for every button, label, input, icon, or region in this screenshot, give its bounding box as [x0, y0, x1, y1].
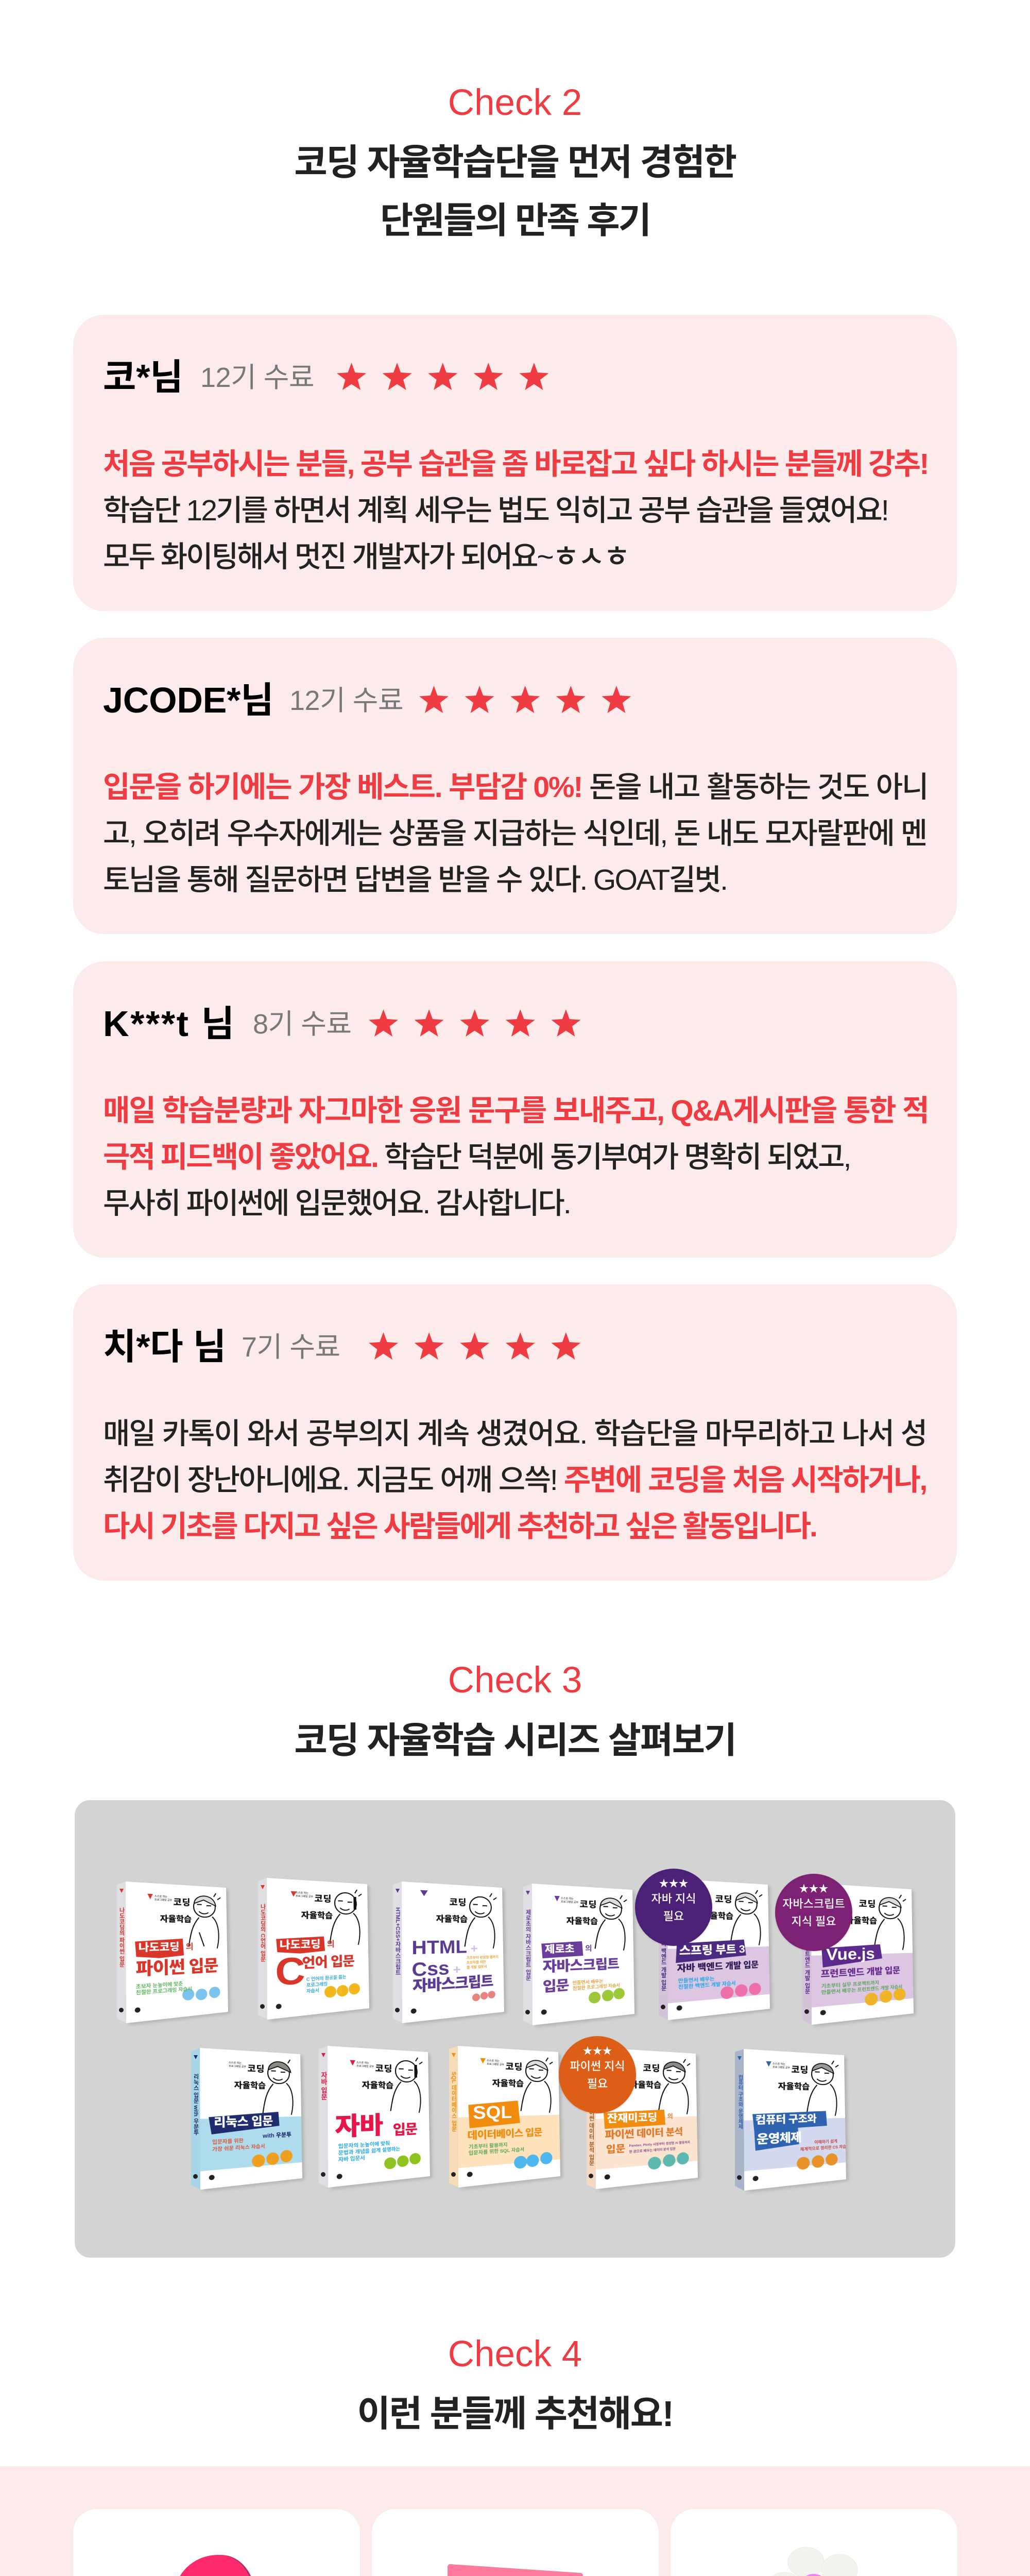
- heading: reviews: 코딩 자율학습단을 먼저 경험한: [294, 142, 736, 182]
- book: C language: 스스로 하는: [296, 1891, 308, 1895]
- review card 1: [73, 315, 957, 611]
- book: SQL: 기초부터 활용까지: [469, 2142, 508, 2150]
- book: python: 코딩: [173, 1897, 191, 1907]
- book: HTML CSS JavaScript: 코딩: [449, 1897, 467, 1907]
- review text: 다시 기초를 다지고 싶은 사람들에게 추천하고 싶은 활동입니다.: [103, 1510, 816, 1543]
- book: python: 친절한 프로그래밍 자습서: [136, 1987, 192, 1996]
- book: Vue.js: 기초부터 실무 프로젝트까지: [821, 1980, 879, 1990]
- book: Python data analysis: 자율학습: [630, 2080, 661, 2090]
- book: Python data analysis: 파이썬 데이터 분석 입문: [588, 2104, 594, 2165]
- book: Linux: 가장 쉬운 리눅스 자습서: [212, 2144, 265, 2153]
- book: Vue.js: Vue.js: [826, 1945, 875, 1964]
- book: Java: 자바 입문: [320, 2072, 328, 2100]
- book: Java: [319, 2046, 434, 2190]
- heading: recommendations: 이런 분들께 추천해요!: [357, 2394, 673, 2434]
- reviewer name: 치*다 님: [103, 1327, 226, 1367]
- book: HTML CSS JavaScript: 기초부터 완성형 웹까지: [467, 1956, 499, 1960]
- badge: Python knowledge required: ★★★: [582, 2046, 612, 2057]
- review text: 입문을 하기에는 가장 베스트. 부담감 0%! 돈을 내고 활동하는 것도 아니: [103, 771, 928, 804]
- cohort label: 12기 수료: [289, 685, 403, 716]
- book: Linux: 스스로 하는: [229, 2061, 242, 2065]
- book: Java: 스스로 하는: [356, 2061, 369, 2065]
- cohort label: 7기 수료: [242, 1332, 340, 1363]
- book: Python data analysis: Pandas, Plotly 사용부터 생성형 AI 활용까지: [629, 2141, 690, 2148]
- recommendation card: learners: [671, 2509, 957, 2576]
- book: SQL: SQL: [473, 2102, 512, 2123]
- badge: JavaScript knowledge required: 자바스크립트: [782, 1897, 845, 1910]
- book: python: 의: [186, 1942, 194, 1952]
- book: SQL: 데이터베이스 입문: [467, 2127, 542, 2142]
- section label: Check 3: Check 3: [448, 1660, 582, 1701]
- book: Linux: 자율학습: [234, 2081, 266, 2090]
- book: python: 파이썬 입문: [135, 1957, 218, 1979]
- book: python: [117, 1882, 232, 2026]
- book: Java: 입문: [393, 2122, 417, 2138]
- book: Java: 입문자의 눈높이에 맞춰: [338, 2141, 390, 2150]
- reviewer name: JCODE*님: [103, 680, 273, 720]
- book: Linux: 코딩: [247, 2064, 265, 2074]
- book: C language: 의: [327, 1940, 335, 1949]
- book: computer architecture and OS: 자율학습: [778, 2082, 810, 2091]
- book: SQL: 스스로 하는: [487, 2059, 500, 2063]
- book: Spring Boot: [659, 1880, 774, 2023]
- book: JavaScript intro: 의: [585, 1944, 592, 1953]
- book: Spring Boot: 자율학습: [702, 1911, 733, 1921]
- badge: JavaScript knowledge required: 지식 필요: [791, 1915, 836, 1928]
- recommendation card: beginners: [73, 2509, 360, 2576]
- book: Spring Boot: 자바 백엔드 개발 입문: [677, 1960, 759, 1974]
- book: Vue.js: 자율학습: [846, 1916, 877, 1925]
- recommendation card: developers: [372, 2509, 659, 2576]
- book: HTML CSS JavaScript: 자바스크립트: [413, 1974, 493, 1995]
- heading: reviews: 단원들의 만족 후기: [380, 200, 650, 241]
- book: JavaScript intro: 제로초: [545, 1944, 575, 1955]
- book: computer architecture and OS: 프로그래밍 공부: [772, 2066, 790, 2070]
- book: Python data analysis: 코딩: [643, 2063, 660, 2073]
- review text: [103, 1094, 928, 1220]
- book: Java: 코딩: [375, 2063, 393, 2074]
- review text: 취감이 장난아니에요. 지금도 어깨 으쓱! 주변에 코딩을 처음 시작하거나,: [103, 1464, 926, 1497]
- pink lower background band: [0, 2466, 1030, 2576]
- book: HTML CSS JavaScript: 웹 개발 입문서: [467, 1965, 487, 1970]
- book: Vue.js: 프런트엔드 개발 입문: [804, 1940, 810, 1994]
- book: computer architecture and OS: 컴퓨터 구조와: [756, 2113, 816, 2126]
- book: HTML CSS JavaScript: 초보자를 위한: [467, 1960, 486, 1964]
- cohort label: 12기 수료: [200, 362, 314, 393]
- book: Linux: 리눅스 입문 with 우분투: [193, 2074, 199, 2135]
- book: computer architecture and OS: [735, 2049, 850, 2193]
- book: Linux: 리눅스 입문: [214, 2115, 273, 2130]
- book: JavaScript intro: 프로그래밍 공부: [561, 1901, 578, 1904]
- book: Linux: with 우분투: [263, 2131, 291, 2139]
- badge: JavaScript knowledge required: [775, 1874, 852, 1951]
- book: Python data analysis: 잔재미코딩: [607, 2112, 657, 2125]
- book: HTML CSS JavaScript: [393, 1882, 508, 2026]
- book: C language: 코딩: [314, 1894, 332, 1904]
- book: Spring Boot: 친절한 백엔드 개발 자습서: [678, 1981, 736, 1991]
- star rating: [337, 363, 549, 390]
- book: python: 나도코딩의 파이썬 입문: [118, 1907, 125, 1967]
- book: computer architecture and OS: 운영체제: [757, 2131, 801, 2147]
- review text: 매일 학습분량과 자그마한 응원 문구를 보내주고, Q&A게시판을 통한 적: [103, 1094, 928, 1127]
- book: python: 나도코딩: [139, 1941, 180, 1954]
- review text: 매일 카톡이 와서 공부의지 계속 생겼어요. 학습단을 마무리하고 나서 성: [103, 1417, 926, 1450]
- book: C language: 자습서: [306, 1988, 319, 1994]
- book: Java: 프로그래밍 공부: [356, 2065, 374, 2069]
- star rating: [369, 1332, 581, 1360]
- book: Java: 자율학습: [362, 2080, 393, 2090]
- review text: [103, 771, 928, 896]
- book: JavaScript intro: 만들면서 배우는: [573, 1979, 603, 1986]
- reviewer name: K***t 님: [103, 1004, 236, 1044]
- heading: reviews: [294, 142, 736, 241]
- review text: 극적 피드백이 좋았어요. 학습단 덕분에 동기부여가 명확히 되었고,: [103, 1141, 850, 1174]
- icon: question mark: [180, 2555, 251, 2576]
- book: Linux: [191, 2048, 306, 2192]
- book: HTML CSS JavaScript: HTML+CSS+자바스크립트: [394, 1907, 401, 1975]
- review card 4: [73, 1284, 957, 1581]
- section label: Check 4: Check 4: [448, 2334, 582, 2375]
- review text: 무사히 파이썬에 입문했어요. 감사합니다.: [103, 1187, 570, 1220]
- book: computer architecture and OS: 스스로 하는: [772, 2062, 785, 2066]
- book: SQL: SQL 데이터베이스 입문: [451, 2072, 457, 2132]
- book: SQL: 코딩: [505, 2062, 523, 2072]
- review text: 토님을 통해 질문하면 답변을 받을 수 있다. GOAT길벗.: [103, 863, 727, 896]
- heading: series: 코딩 자율학습 시리즈 살펴보기: [294, 1720, 736, 1760]
- book: SQL: 프로그래밍 공부: [487, 2063, 504, 2066]
- badge: Python knowledge required: [559, 2036, 636, 2113]
- book: C language: C 언어의 환공을 품는: [306, 1974, 347, 1982]
- badge: Python knowledge required: 필요: [587, 2077, 608, 2090]
- badge: Java knowledge required: ★★★: [659, 1878, 688, 1889]
- book: Spring Boot: 스프링 부트 3: [679, 1943, 745, 1957]
- book: C language: 프로그래밍 공부: [296, 1895, 313, 1899]
- panel: book series: [75, 1800, 955, 2258]
- book: python: 프로그래밍 공부: [154, 1899, 172, 1902]
- book: JavaScript intro: 코딩: [579, 1900, 597, 1909]
- book: computer architecture and OS: 컴퓨터 구조와 운영체제: [737, 2075, 743, 2129]
- book: Python data analysis: 한 권으로 배우는 데이터 분석 입문: [629, 2147, 676, 2154]
- book: Linux: 프로그래밍 공부: [229, 2065, 246, 2069]
- star rating: [369, 1009, 581, 1037]
- book: JavaScript intro: 입문: [543, 1978, 569, 1995]
- book: python: 초보자 눈높이에 맞춘: [136, 1981, 183, 1990]
- badge: Java knowledge required: 자바 지식: [651, 1892, 696, 1905]
- book: Python data analysis: 파이썬 데이터 분석: [605, 2127, 683, 2141]
- icon: id card: [448, 2564, 583, 2576]
- book: computer architecture and OS: 코딩: [791, 2065, 809, 2075]
- reviewer name: 코*님: [103, 357, 183, 397]
- book: C language: C: [275, 1950, 305, 1994]
- book: JavaScript intro: 자율학습: [566, 1917, 598, 1926]
- book: C language: 언어 입문: [302, 1954, 354, 1971]
- review card 2: [73, 638, 957, 934]
- book: python: 스스로 하는: [154, 1895, 167, 1899]
- book: Spring Boot: 자바 백엔드 개발 입문: [660, 1935, 666, 1991]
- book: Linux: 입문자를 위한: [212, 2139, 244, 2146]
- badge: Java knowledge required: 필요: [663, 1910, 684, 1923]
- book: C language: 나도코딩: [280, 1939, 321, 1951]
- book: Vue.js: 만들면서 배우는 프런트엔드 개발 자습서: [821, 1985, 902, 1996]
- book: Vue.js: 프런트엔드 개발 입문: [820, 1965, 900, 1979]
- book: Vue.js: 코딩: [859, 1899, 876, 1909]
- book: Python data analysis: 입문: [606, 2144, 625, 2156]
- book: computer architecture and OS: 이해하기 쉽게: [814, 2139, 837, 2145]
- book: Spring Boot: 만들면서 배우는: [678, 1976, 714, 1985]
- book: Python data analysis: 의: [667, 2113, 673, 2120]
- section label: Check 2: Check 2: [448, 82, 582, 123]
- star rating: [419, 686, 631, 713]
- badge: Python knowledge required: 파이썬 지식: [570, 2060, 625, 2073]
- book: C language: [258, 1878, 373, 2022]
- review text: 고, 오히려 우수자에게는 상품을 지급하는 식인데, 돈 내도 모자랄판에 멘: [103, 817, 926, 850]
- badge: JavaScript knowledge required: ★★★: [799, 1884, 828, 1894]
- book: Java: 자바: [335, 2112, 383, 2141]
- book: JavaScript intro: 스스로 하는: [561, 1897, 574, 1901]
- review card 3: [73, 961, 957, 1258]
- review text: [103, 1417, 926, 1543]
- book: SQL: [449, 2046, 563, 2190]
- book: SQL: 자율학습: [492, 2079, 524, 2088]
- book: HTML CSS JavaScript: 자율학습: [436, 1914, 468, 1924]
- review text: 학습단 12기를 하면서 계획 세우는 법도 익히고 공부 습관을 들였어요!: [103, 494, 888, 527]
- book: SQL: 입문자를 위한 SQL 자습서: [469, 2147, 524, 2157]
- book: Vue.js: [802, 1885, 917, 2027]
- book: HTML CSS JavaScript: HTML +: [411, 1937, 478, 1959]
- book: C language: 자율학습: [301, 1911, 333, 1920]
- book: JavaScript intro: 자바스크립트: [542, 1957, 619, 1975]
- book: JavaScript intro: 친절한 프로그래밍 자습서: [573, 1983, 620, 1991]
- book: C language: 프로그래밍: [306, 1981, 328, 1988]
- book: Python data analysis: [587, 2049, 701, 2192]
- badge: Java knowledge required: [635, 1869, 712, 1946]
- book: Java: 자바 입문서: [338, 2156, 365, 2163]
- cohort label: 8기 수료: [253, 1009, 352, 1040]
- review text: 처음 공부하시는 분들, 공부 습관을 좀 바로잡고 싶다 하시는 분들께 강추!: [103, 448, 928, 481]
- book: Spring Boot: 코딩: [715, 1894, 732, 1904]
- book: HTML CSS JavaScript: Css +: [411, 1958, 461, 1981]
- icon: flower: [772, 2547, 858, 2576]
- review text: 모두 화이팅해서 멋진 개발자가 되어요~ㅎㅅㅎ: [103, 540, 629, 573]
- book: JavaScript intro: 제로초의 자바스크립트 입문: [525, 1909, 531, 1980]
- review text: [103, 448, 928, 573]
- book: C language: 나도코딩의 C언어 입문: [260, 1904, 266, 1962]
- book: JavaScript intro: [523, 1884, 638, 2028]
- book: Java: 문법과 개념을 쉽게 설명하는: [338, 2147, 400, 2157]
- book: python: 자율학습: [160, 1914, 192, 1924]
